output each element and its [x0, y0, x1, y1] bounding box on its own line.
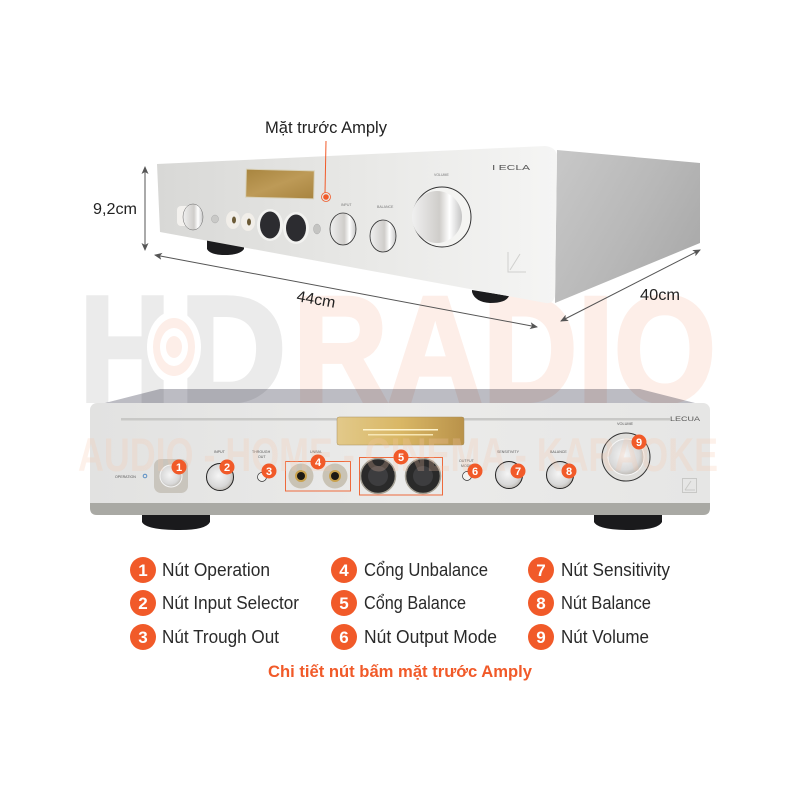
legend item 6 — [331, 624, 497, 650]
amplifier front panel — [157, 146, 557, 303]
LECUA brand: I ECLA — [492, 165, 531, 172]
chassis — [90, 403, 710, 515]
legend item 4: Cổng Unbalance — [364, 560, 488, 580]
legend item 7 — [528, 557, 670, 583]
front panel tiny labels: VOLUME — [434, 173, 449, 177]
legend item 4 — [331, 557, 488, 583]
legend item 2: 2 — [138, 594, 148, 613]
operation label and LED: OPERATION — [115, 475, 136, 479]
gold display — [246, 169, 314, 199]
badge 3: 3 — [266, 466, 272, 478]
legend item 3 — [130, 624, 279, 650]
balance ports — [360, 458, 442, 495]
legend item 1: 1 — [138, 561, 148, 580]
operation button — [177, 206, 191, 226]
infographic canvas — [79, 121, 716, 680]
legend item 2: Nút Input Selector — [162, 593, 299, 613]
dimension: height 9,2cm: 9,2cm — [93, 201, 137, 218]
chassis bottom strip — [90, 503, 710, 515]
badge 6 — [468, 464, 482, 478]
output mode button — [314, 224, 320, 234]
foot: front left — [207, 240, 244, 255]
input knob — [206, 450, 234, 490]
through out button: OUT — [258, 455, 266, 459]
badge 8 — [562, 464, 576, 478]
output mode button — [459, 459, 475, 480]
amplifier photo: perspective view — [157, 146, 700, 303]
operation button — [154, 459, 188, 493]
badge 5: 5 — [398, 452, 404, 464]
badge 5 — [394, 450, 408, 464]
through out button — [252, 450, 271, 482]
caption: Chi tiết nút bấm mặt trước Amply — [268, 663, 533, 681]
unbalance ports — [286, 450, 350, 491]
legend item 3: 3 — [138, 628, 148, 647]
watermark: HD RADIO logo — [86, 294, 712, 403]
through out button: THROUGH — [252, 450, 271, 454]
sensitivity knob — [330, 213, 356, 245]
badge 1: 1 — [176, 462, 182, 474]
gold display — [337, 417, 464, 445]
legend item 2 — [130, 590, 299, 616]
sensitivity knob — [496, 450, 522, 488]
legend item 9 — [528, 624, 649, 650]
badge 2: 2 — [224, 462, 230, 474]
legend item 4: 4 — [339, 561, 349, 580]
legend item 5: 5 — [339, 594, 349, 613]
legend item 6: Nút Output Mode — [364, 627, 497, 647]
legend item 1: Nút Operation — [162, 560, 270, 580]
badge 4: 4 — [315, 457, 322, 469]
watermark: HD RADIO logo: D — [180, 265, 286, 433]
amplifier: front view — [90, 403, 710, 530]
operation label and LED — [115, 474, 147, 479]
dimension: depth 40cm — [561, 250, 700, 321]
dimension: depth 40cm: 40cm — [640, 287, 680, 304]
badge 7: 7 — [515, 466, 521, 478]
input knob — [183, 204, 203, 230]
front panel tiny labels: INPUT — [341, 203, 352, 207]
balance knob — [370, 220, 396, 252]
legend item 8: Nút Balance — [561, 593, 651, 613]
logo mark — [508, 252, 526, 272]
foot: right — [594, 514, 662, 530]
legend — [130, 557, 670, 650]
dimension: width 44cm: 44cm — [295, 288, 337, 312]
unbalance ports: UNBAL — [310, 450, 322, 454]
LECUA brand: LECUA — [670, 416, 701, 423]
front panel tiny labels: BALANCE — [377, 205, 394, 209]
badge 3 — [262, 464, 276, 478]
foot: left — [142, 514, 210, 530]
legend item 5: Cổng Balance — [364, 593, 466, 613]
badge 7 — [510, 464, 526, 478]
callout: Mặt trước Amply: Mặt trước Amply — [265, 119, 388, 137]
watermark: HD RADIO logo: RADIO — [293, 265, 716, 433]
volume knob: VOLUME — [617, 422, 634, 426]
output mode button: OUTPUT — [459, 459, 475, 463]
badge 4 — [310, 454, 326, 470]
watermark: HD RADIO logo: H — [80, 265, 170, 433]
number badges on amplifier — [172, 434, 646, 478]
unbalance jacks — [226, 211, 255, 231]
legend item 3: Nút Trough Out — [162, 627, 279, 647]
badge 9: 9 — [636, 437, 642, 449]
legend item 8 — [528, 590, 651, 616]
legend item 1 — [130, 557, 270, 583]
legend item 6: 6 — [339, 628, 349, 647]
balance knob: BALANCE — [550, 450, 567, 454]
badge 9 — [632, 434, 646, 450]
foot: front right — [472, 290, 509, 303]
top groove line — [121, 418, 670, 420]
legend item 7: 7 — [536, 561, 546, 580]
dimension: height 9,2cm — [93, 167, 145, 250]
front panel tiny labels — [341, 173, 449, 209]
output mode button: MODE — [461, 464, 472, 468]
callout: Mặt trước Amply — [265, 119, 388, 202]
badge 2 — [220, 460, 234, 474]
volume knob — [412, 187, 471, 247]
input knob: INPUT — [214, 450, 226, 454]
legend item 5 — [331, 590, 466, 616]
badge 6: 6 — [472, 466, 478, 478]
legend item 7: Nút Sensitivity — [561, 560, 670, 580]
dimension: width 44cm — [155, 255, 537, 327]
balance XLR ports — [257, 209, 309, 244]
legend item 9: 9 — [536, 628, 546, 647]
through out button — [212, 215, 218, 223]
volume knob — [602, 422, 650, 481]
balance knob — [546, 450, 574, 488]
amplifier side panel — [555, 150, 700, 303]
legend item 8: 8 — [536, 594, 546, 613]
badge 8: 8 — [566, 466, 572, 478]
sensitivity knob: SENSITIVITY — [497, 450, 520, 454]
logo mark — [682, 478, 696, 492]
legend item 9: Nút Volume — [561, 627, 649, 647]
bottom amplifier top surface — [105, 389, 695, 403]
badge 1 — [172, 460, 186, 474]
